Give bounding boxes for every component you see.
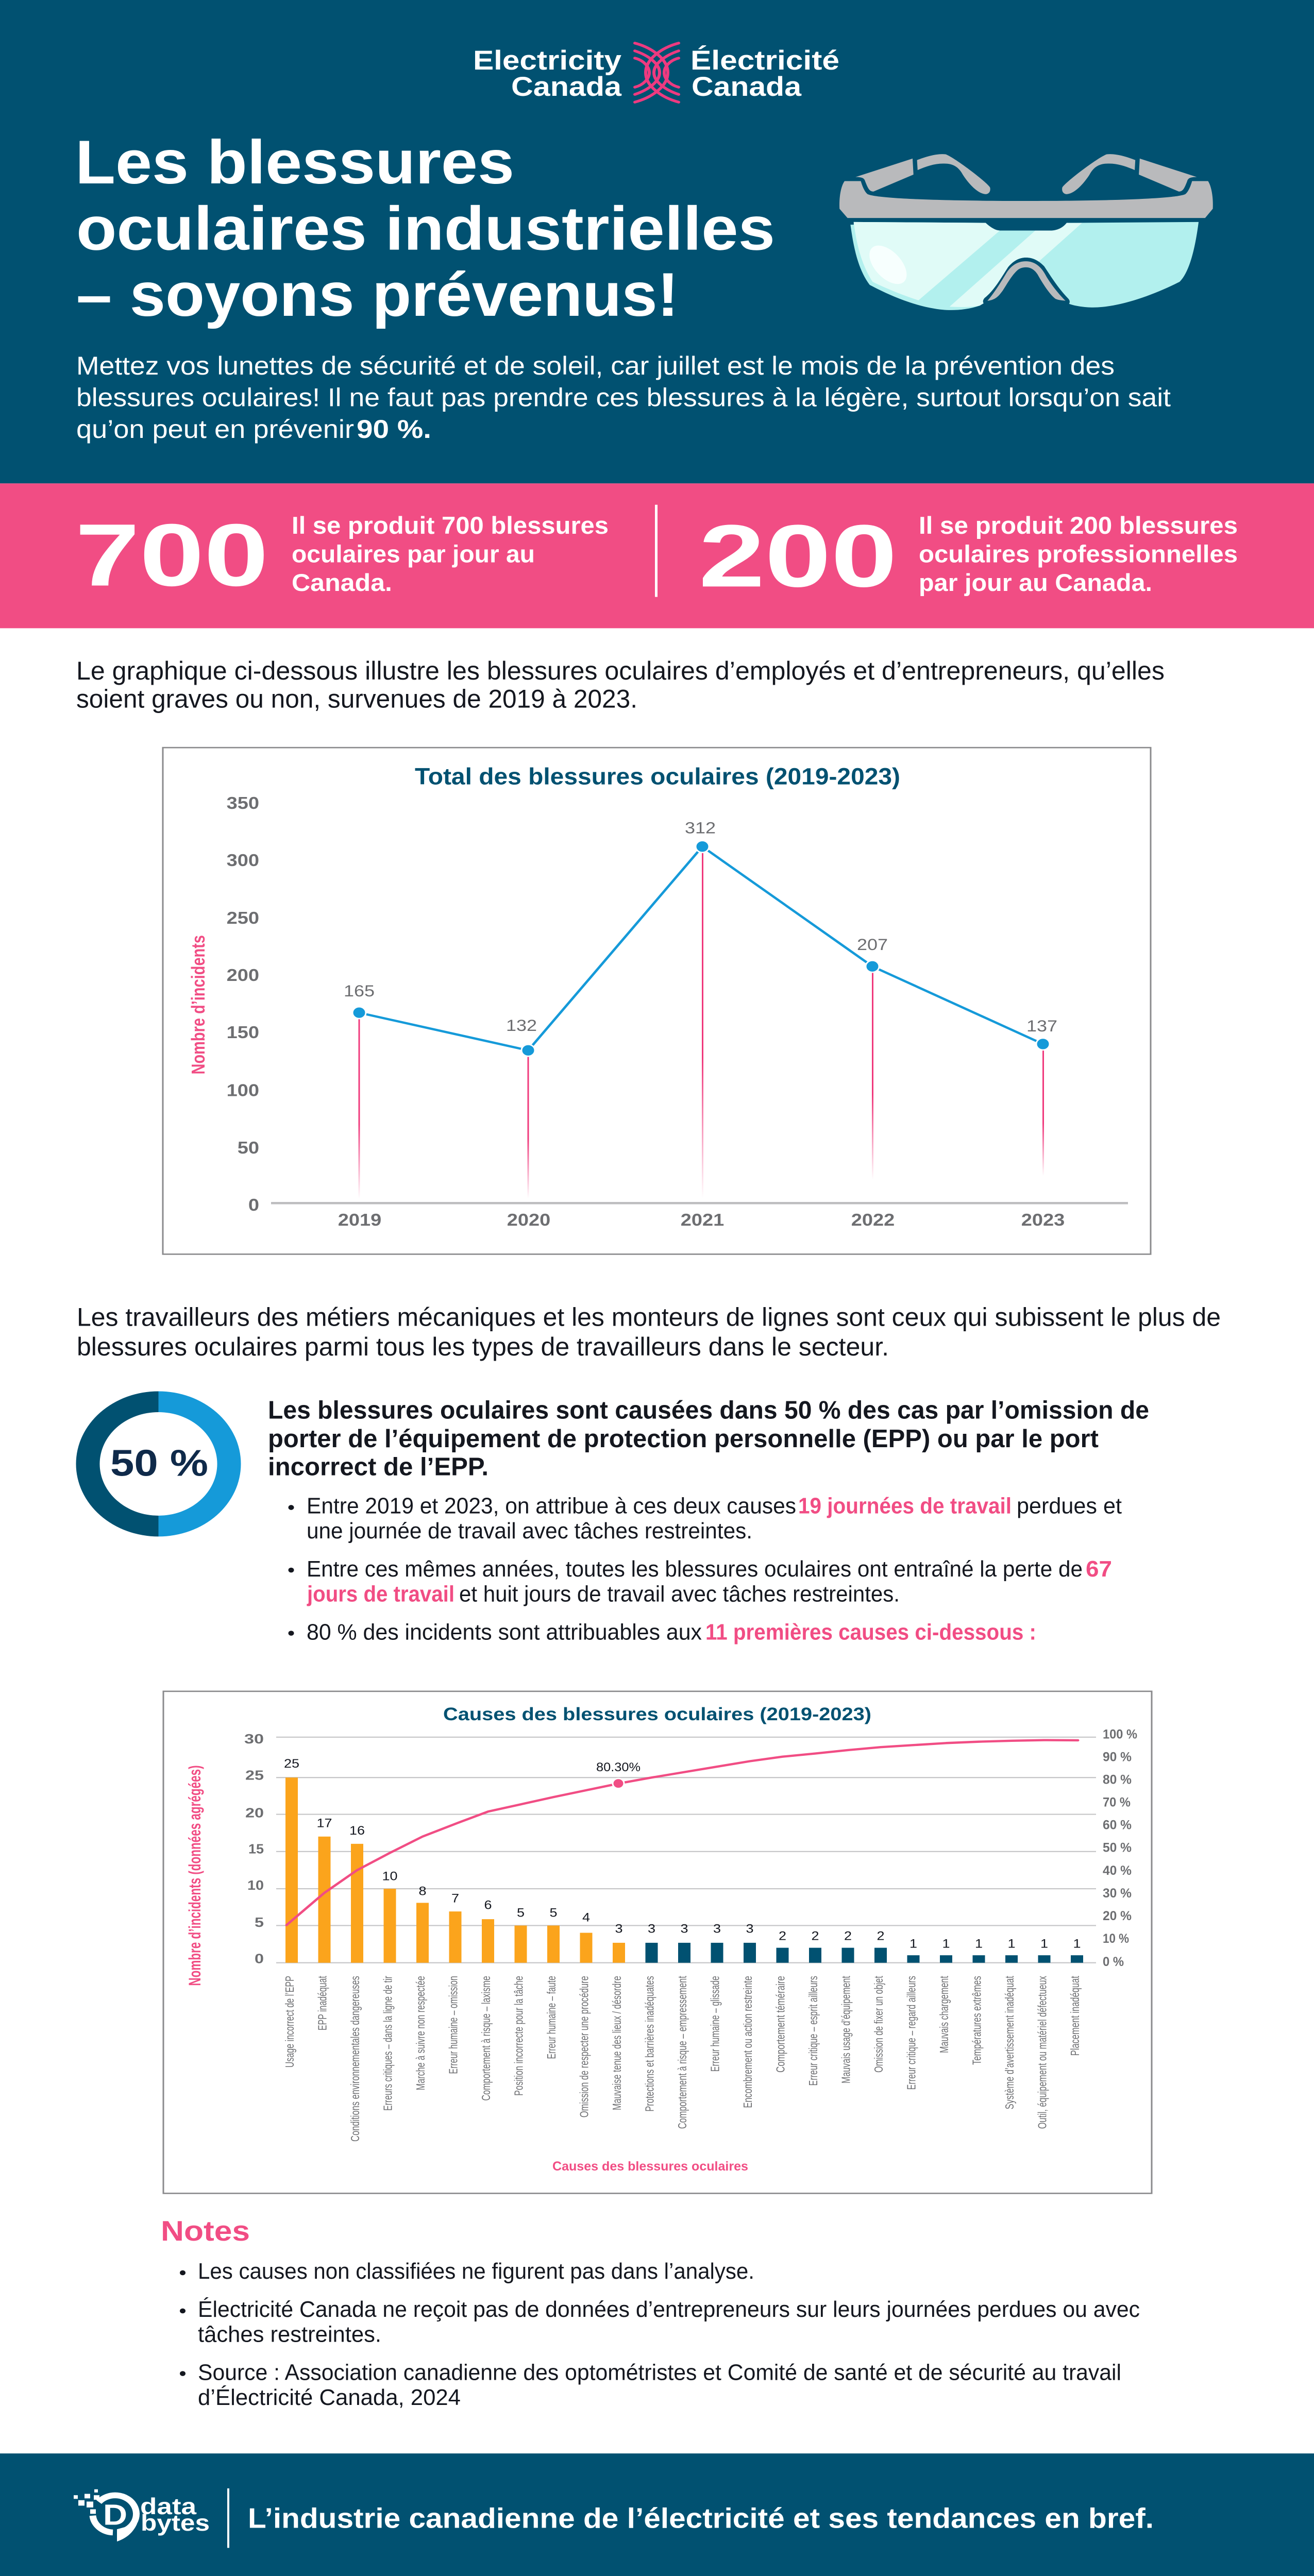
bar values: 25 bbox=[284, 1757, 299, 1770]
footer tagline: L’industrie canadienne de l’électricité et ses tendances en bref. bbox=[248, 2503, 1154, 2534]
icon: safety glasses bbox=[839, 154, 1213, 310]
logo: Electricity Canada: Canada bbox=[511, 71, 622, 101]
bullet list: key facts: Entre 2019 et 2023, on attribue à ces deux causes bbox=[307, 1493, 796, 1518]
bars: other causes bbox=[645, 1943, 1083, 1963]
bar values: 1 bbox=[942, 1937, 950, 1951]
category labels: Protections et barrières inadéquates bbox=[643, 1976, 656, 2112]
text block: chart introduction: soient graves ou non, survenues de 2019 à 2023. bbox=[76, 685, 637, 714]
y axis labels: 300 bbox=[227, 851, 259, 870]
stat: 200: Il se produit 200 blessures bbox=[919, 512, 1238, 539]
logo: Electricity Canada bbox=[473, 43, 839, 102]
stat: 700: Il se produit 700 blessures bbox=[292, 512, 609, 539]
bullet list: key facts: 67 bbox=[1086, 1556, 1112, 1581]
bar values: 1 bbox=[1073, 1937, 1081, 1951]
logo: data bytes: data bbox=[140, 2494, 197, 2519]
category labels: Erreur critique – esprit ailleurs bbox=[806, 1976, 820, 2086]
bars: top 11 causes bbox=[285, 1777, 625, 1963]
intro paragraph: blessures oculaires! Il ne faut pas prendre ces blessures à la légère, surtout lorsqu’on sait bbox=[76, 383, 1171, 412]
text block: workers: blessures oculaires parmi tous les types de travailleurs dans le secteur. bbox=[77, 1332, 889, 1361]
bullet list: key facts: 19 journées de travail bbox=[798, 1493, 1012, 1518]
gridlines bbox=[276, 1737, 1096, 1963]
left axis labels: 10 bbox=[247, 1877, 264, 1892]
stat: 700: 700 bbox=[75, 505, 268, 604]
category labels: Omission de respecter une procédure bbox=[577, 1976, 591, 2117]
bullet list: key facts bbox=[289, 1493, 1122, 1645]
value labels: 207 bbox=[857, 936, 888, 954]
logo: data bytes: D bbox=[103, 2498, 127, 2531]
donut: 50 % bbox=[76, 1391, 241, 1536]
right axis labels: 50 % bbox=[1103, 1840, 1132, 1855]
bar values: 8 bbox=[418, 1885, 427, 1898]
text block: chart introduction: Le graphique ci-dessous illustre les blessures oculaires d’employés et d’entrepreneurs, qu’elles bbox=[76, 656, 1165, 685]
y axis labels: 100 bbox=[227, 1081, 259, 1100]
category labels: Usage incorrect de l’EPP bbox=[283, 1976, 296, 2067]
x axis labels: 2019 bbox=[338, 1210, 381, 1229]
stats band bbox=[0, 483, 1314, 628]
stat: 200: 200 bbox=[699, 506, 897, 605]
marker: 80.30% bbox=[596, 1760, 641, 1788]
baseline axis bbox=[271, 1202, 1128, 1204]
y axis labels: 0 bbox=[248, 1195, 259, 1214]
logo: Electricity Canada: Canada bbox=[692, 71, 802, 101]
x axis labels: 2022 bbox=[851, 1210, 895, 1229]
right axis labels: 90 % bbox=[1103, 1750, 1132, 1764]
intro paragraph bbox=[76, 351, 1171, 444]
y axis title: Nombre d’incidents bbox=[188, 935, 209, 1074]
category labels: Position incorrecte pour la tâche bbox=[512, 1976, 526, 2096]
left axis labels: 5 bbox=[255, 1915, 264, 1930]
value labels: 137 bbox=[1026, 1017, 1057, 1035]
category labels: Système d’avertissement inadéquat bbox=[1003, 1976, 1016, 2109]
notes list: d’Électricité Canada, 2024 bbox=[198, 2385, 461, 2410]
drop lines bbox=[359, 846, 1044, 1199]
heading: causes: porter de l’équipement de protection personnelle (EPP) ou par le port bbox=[268, 1425, 1099, 1453]
bar values: 4 bbox=[582, 1911, 590, 1924]
y axis labels: 200 bbox=[227, 965, 259, 985]
x axis labels bbox=[338, 1210, 1065, 1229]
value labels: 165 bbox=[344, 982, 375, 1000]
category labels: Erreurs critiques – dans la ligne de tir bbox=[381, 1976, 395, 2111]
category labels: Températures extrêmes bbox=[970, 1976, 984, 2065]
x axis labels: 2023 bbox=[1021, 1210, 1065, 1229]
category labels: EPP inadéquat bbox=[315, 1976, 329, 2030]
logo: data bytes: bytes bbox=[141, 2510, 210, 2535]
bullet list: key facts: Entre ces mêmes années, toutes les blessures oculaires ont entraîné la perte de bbox=[307, 1556, 1083, 1581]
notes list bbox=[180, 2259, 1140, 2410]
bullet list: key facts: jours de travail bbox=[307, 1581, 454, 1606]
bar values: 7 bbox=[451, 1892, 459, 1905]
value labels: 312 bbox=[685, 819, 716, 837]
bullet list: key facts: perdues et bbox=[1017, 1493, 1122, 1518]
notes list: Électricité Canada ne reçoit pas de données d’entrepreneurs sur leurs journées perdues ou avec bbox=[198, 2297, 1140, 2321]
title: Les blessures bbox=[75, 128, 514, 197]
category labels: Comportement à risque – empressement bbox=[676, 1976, 689, 2129]
bar values: 5 bbox=[517, 1906, 525, 1920]
x axis labels: 2020 bbox=[507, 1210, 550, 1229]
chart title: Total des blessures oculaires (2019-2023) bbox=[415, 764, 900, 790]
bar values: 16 bbox=[349, 1824, 365, 1838]
stat: 200 bbox=[699, 506, 1238, 605]
title: – soyons prévenus! bbox=[76, 261, 679, 329]
category labels: Omission de fixer un objet bbox=[872, 1976, 885, 2073]
logo: data bytes bbox=[74, 2489, 210, 2541]
category labels: Marche à suivre non respectée bbox=[414, 1976, 427, 2090]
category labels: Erreur critique – regard ailleurs bbox=[904, 1976, 918, 2090]
bar values: 1 bbox=[1007, 1937, 1016, 1951]
heading: causes: Les blessures oculaires sont causées dans 50 % des cas par l’omission de bbox=[268, 1396, 1149, 1425]
intro paragraph: 90 %. bbox=[357, 415, 431, 444]
heading: causes: incorrect de l’EPP. bbox=[268, 1452, 488, 1481]
category labels: Mauvaise tenue des lieux / désordre bbox=[610, 1976, 624, 2110]
title: oculaires industrielles bbox=[76, 194, 775, 263]
right axis labels: 100 % bbox=[1103, 1727, 1137, 1741]
bar values: 3 bbox=[746, 1922, 754, 1936]
notes list: Source : Association canadienne des optométristes et Comité de santé et de sécurité au travail bbox=[198, 2360, 1121, 2385]
intro paragraph: Mettez vos lunettes de sécurité et de soleil, car juillet est le mois de la prévention des bbox=[76, 351, 1115, 380]
stat: 700: oculaires par jour au bbox=[292, 540, 535, 568]
bullet list: key facts: et huit jours de travail avec tâches restreintes. bbox=[459, 1581, 900, 1606]
bar values: 3 bbox=[648, 1922, 655, 1936]
bar values: 2 bbox=[877, 1929, 885, 1943]
bar values: 10 bbox=[382, 1870, 398, 1883]
category labels: Outil, équipement ou matériel défectueux bbox=[1035, 1976, 1049, 2129]
right axis labels: 20 % bbox=[1103, 1908, 1132, 1923]
x axis labels: 2021 bbox=[681, 1210, 724, 1229]
y axis labels: 50 bbox=[238, 1138, 259, 1157]
category labels: Erreur humaine – faute bbox=[545, 1976, 558, 2059]
category labels: Mauvais usage d’équipement bbox=[839, 1976, 853, 2083]
header panel bbox=[0, 0, 1314, 483]
left axis labels: 20 bbox=[245, 1805, 264, 1820]
intro paragraph: qu’on peut en prévenir bbox=[76, 415, 354, 444]
bar values: 6 bbox=[484, 1899, 492, 1912]
category labels bbox=[283, 1976, 1082, 2142]
left axis title: Nombre d’incidents (données agrégées) bbox=[186, 1765, 204, 1986]
bar values: 1 bbox=[1040, 1937, 1048, 1951]
category labels: Erreur humaine – glissade bbox=[708, 1976, 722, 2072]
data points bbox=[352, 841, 1050, 1056]
right axis labels: 10 % bbox=[1103, 1931, 1129, 1946]
bar values: 2 bbox=[779, 1929, 786, 1943]
category labels: Comportement à risque – laxisme bbox=[479, 1976, 493, 2101]
stat: 200: par jour au Canada. bbox=[919, 569, 1152, 596]
bar values: 3 bbox=[615, 1922, 623, 1936]
bar values: 2 bbox=[844, 1929, 852, 1943]
x axis title: Causes des blessures oculaires bbox=[552, 2159, 748, 2174]
right axis labels: 80 % bbox=[1103, 1772, 1132, 1787]
bar values: 2 bbox=[811, 1929, 819, 1943]
right axis labels: 70 % bbox=[1103, 1795, 1131, 1809]
y axis labels: 350 bbox=[227, 793, 259, 813]
title bbox=[75, 128, 775, 329]
bar values: 1 bbox=[975, 1937, 983, 1951]
bullet list: key facts: 11 premières causes ci-dessous : bbox=[705, 1619, 1036, 1645]
donut: 50 %: 50 % bbox=[110, 1443, 208, 1484]
bar values: 3 bbox=[680, 1922, 688, 1936]
right axis labels: 60 % bbox=[1103, 1818, 1132, 1832]
right axis labels: 0 % bbox=[1103, 1954, 1124, 1969]
bar values bbox=[284, 1757, 1081, 1951]
notes list: Les causes non classifiées ne figurent pas dans l’analyse. bbox=[198, 2259, 754, 2283]
category labels: Mauvais chargement bbox=[937, 1976, 951, 2053]
bar values: 17 bbox=[316, 1817, 332, 1830]
stat: 200: oculaires professionnelles bbox=[919, 540, 1238, 568]
y axis labels: 250 bbox=[227, 908, 259, 927]
notes list: tâches restreintes. bbox=[198, 2321, 381, 2347]
bullet list: key facts: 80 % des incidents sont attribuables aux bbox=[307, 1619, 702, 1645]
stat: 700: Canada. bbox=[292, 569, 392, 596]
category labels: Comportement téméraire bbox=[773, 1976, 787, 2073]
logo: Electricity Canada: Électricité bbox=[690, 45, 839, 75]
left axis labels: 25 bbox=[245, 1768, 264, 1783]
stat: 700 bbox=[75, 505, 609, 604]
notes heading: Notes bbox=[161, 2215, 250, 2247]
left axis labels: 15 bbox=[248, 1841, 264, 1856]
left axis labels: 30 bbox=[244, 1732, 264, 1747]
y axis labels: 150 bbox=[227, 1023, 259, 1042]
bar values: 3 bbox=[713, 1922, 721, 1936]
text block: workers bbox=[77, 1303, 1221, 1361]
category labels: Encombrement ou action restreinte bbox=[741, 1976, 754, 2108]
panel: line chart of total eye injuries bbox=[163, 748, 1151, 1254]
marker: 80.30%: 80.30% bbox=[596, 1760, 641, 1774]
category labels: Conditions environnementales dangereuses bbox=[348, 1976, 362, 2142]
text block: chart introduction bbox=[76, 656, 1165, 714]
right axis labels: 30 % bbox=[1103, 1886, 1132, 1900]
bullet list: key facts: une journée de travail avec tâches restreintes. bbox=[307, 1518, 752, 1543]
data line bbox=[359, 846, 1043, 1050]
panel: Pareto chart of causes bbox=[163, 1691, 1152, 2193]
value labels: 132 bbox=[506, 1016, 537, 1035]
bar values: 1 bbox=[909, 1937, 917, 1951]
right axis labels bbox=[1103, 1727, 1137, 1969]
right axis labels: 40 % bbox=[1103, 1863, 1132, 1877]
category labels: Placement inadéquat bbox=[1068, 1976, 1082, 2056]
cumulative percentage line bbox=[287, 1740, 1078, 1925]
category labels: Erreur humaine – omission bbox=[446, 1976, 460, 2074]
bar values: 5 bbox=[549, 1906, 558, 1920]
value labels bbox=[344, 819, 1057, 1035]
left axis labels bbox=[244, 1732, 264, 1966]
left axis labels: 0 bbox=[255, 1951, 264, 1966]
y axis labels bbox=[227, 793, 259, 1214]
logo: Electricity Canada: Electricity bbox=[473, 45, 622, 75]
footer bbox=[0, 2453, 1314, 2576]
heading: causes bbox=[268, 1396, 1149, 1481]
chart title: Causes des blessures oculaires (2019-2023) bbox=[443, 1704, 871, 1724]
